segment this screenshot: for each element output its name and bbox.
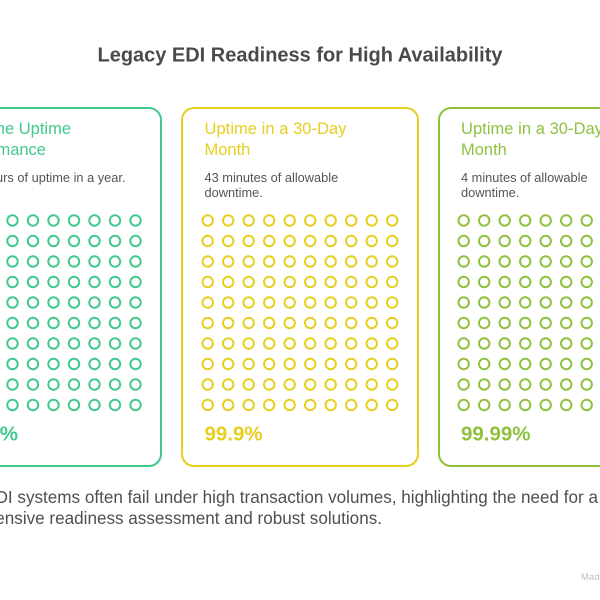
card percentage: 99.99%: [461, 422, 531, 446]
dot grid: [202, 215, 397, 410]
card outline: [0, 108, 161, 466]
card description: downtime.: [461, 185, 519, 200]
card heading: [0, 120, 71, 159]
card heading: [204, 120, 347, 159]
card description: downtime.: [204, 185, 263, 200]
card heading: Uptime in a 30-Day: [461, 120, 600, 138]
card heading: Month: [461, 141, 507, 159]
panel: extreme uptime performance: [0, 108, 161, 466]
card outline: [439, 108, 600, 466]
panel: 99.99% uptime: [439, 108, 600, 466]
card percentage: 99.9%: [204, 422, 263, 446]
title: Legacy EDI Readiness for High Availability: [98, 44, 503, 66]
card heading: Uptime in a 30-Day: [204, 120, 347, 138]
dot grid: [458, 215, 600, 410]
card heading: [461, 120, 600, 159]
card outline: [182, 108, 418, 466]
summary text: [0, 488, 598, 528]
card description: 4 minutes of allowable: [461, 170, 588, 185]
card description: 43 minutes of allowable: [204, 170, 338, 185]
card description: [204, 170, 338, 200]
card heading: Month: [204, 141, 250, 159]
panel: 99.9% uptime: [182, 108, 418, 466]
card description: [461, 170, 588, 200]
dot grid: [0, 215, 141, 410]
